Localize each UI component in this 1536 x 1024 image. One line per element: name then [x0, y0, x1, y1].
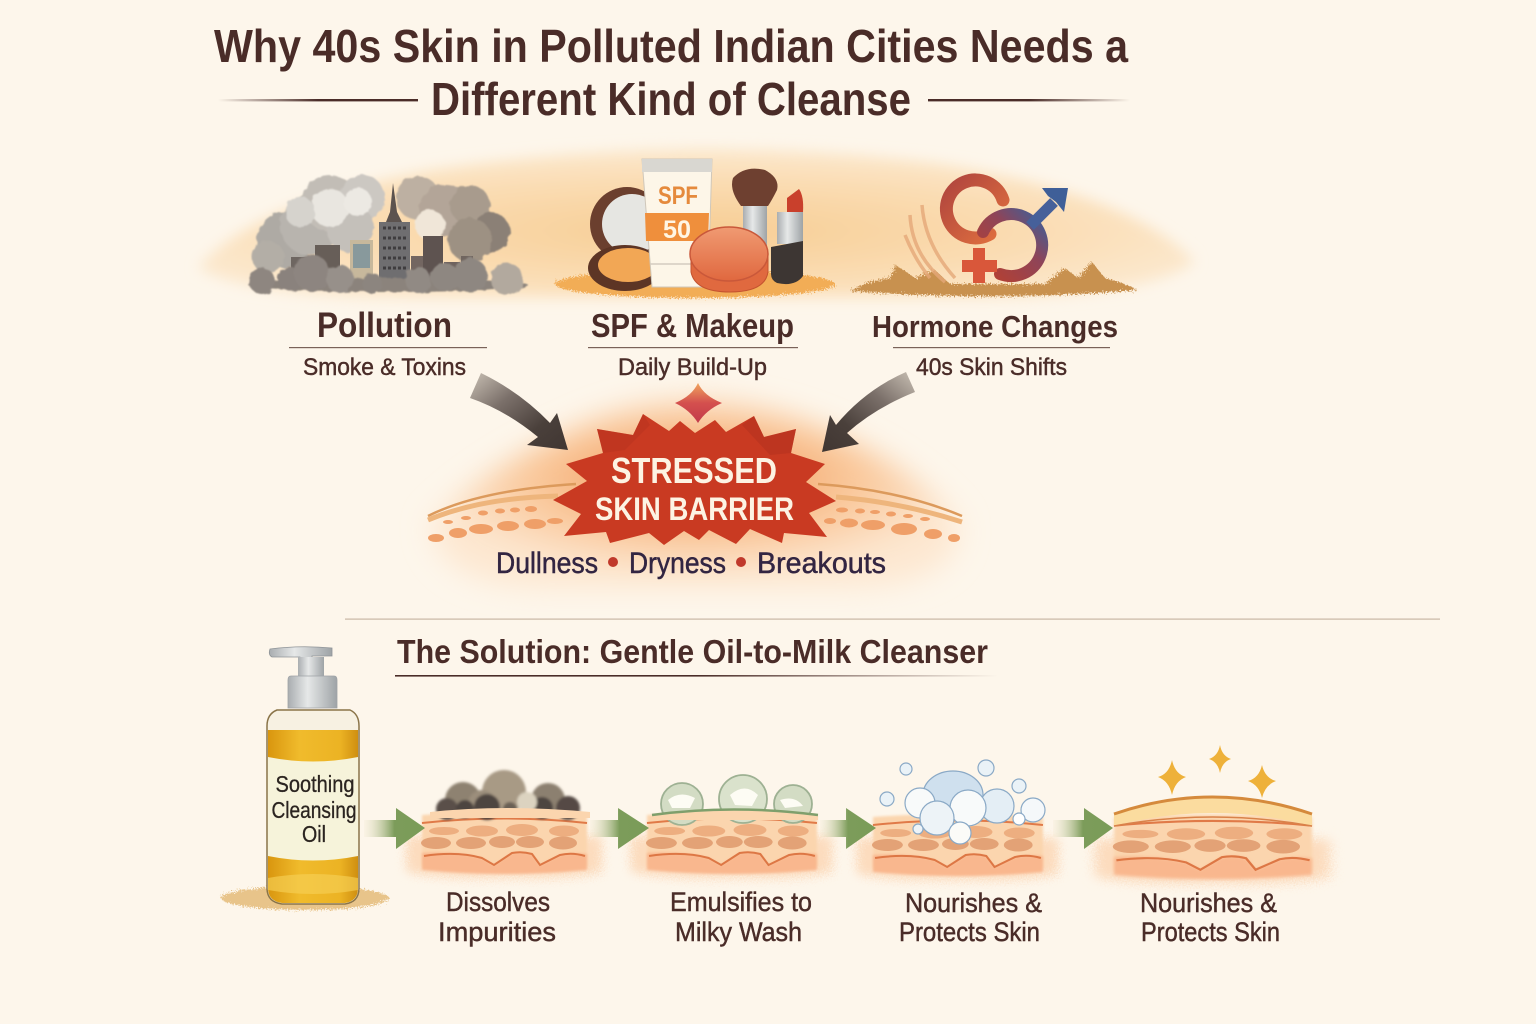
- icon: cleansing oil bottle: [221, 647, 389, 910]
- title: [214, 20, 1130, 125]
- skin layers right: [818, 484, 962, 542]
- heading: SPF and Makeup: [588, 307, 798, 381]
- heading: Pollution: Pollution: [317, 306, 452, 345]
- step 3: nourishes with foam: [857, 760, 1058, 947]
- icon: SPF tube and makeup: SPF: [658, 182, 698, 210]
- panel: causes backdrop haze: [198, 149, 1195, 298]
- brush: [743, 204, 767, 249]
- bottle label: Soothing: [276, 771, 354, 797]
- step 2: emulsifies: [631, 775, 832, 947]
- title: Why 40s Skin in Polluted Indian Cities Needs a: [214, 20, 1128, 72]
- label: Milky Wash: [675, 917, 802, 947]
- heading: Pollution: Smoke & Toxins: [303, 354, 466, 381]
- symptoms: Breakouts: [757, 547, 886, 580]
- label: [438, 887, 556, 947]
- icon: SPF tube and makeup: 50: [663, 216, 691, 244]
- heading: the solution: The Solution: Gentle Oil-to-Milk Cleanser: [397, 633, 988, 670]
- sparkles: [1158, 745, 1276, 798]
- icon: hormone symbols: [850, 180, 1138, 296]
- label: Emulsifies to: [670, 887, 812, 917]
- divider: [345, 618, 1440, 620]
- symptoms: Dullness: [496, 547, 598, 580]
- compact: [590, 187, 664, 261]
- burst label: SKIN BARRIER: [595, 491, 794, 527]
- symptoms: [496, 547, 886, 580]
- step 1: dissolves impurities: [406, 770, 602, 947]
- heading: Hormone Changes: Hormone Changes: [872, 309, 1118, 344]
- step 4: healthy skin: [1095, 745, 1330, 947]
- label: Nourishes &: [1140, 888, 1277, 918]
- label: [1140, 888, 1280, 947]
- label: Impurities: [438, 917, 556, 947]
- skin layers left: [428, 484, 576, 542]
- burst label: [595, 450, 794, 527]
- arrow: step 1: [364, 808, 425, 849]
- heading: Hormone Changes: 40s Skin Shifts: [916, 354, 1067, 381]
- heading: SPF and Makeup: Daily Build-Up: [618, 354, 767, 381]
- arrow: step 3: [820, 808, 876, 849]
- label: Protects Skin: [899, 917, 1040, 947]
- bottle label: [272, 771, 356, 847]
- title: Different Kind of Cleanse: [431, 73, 911, 125]
- label: [670, 887, 812, 947]
- arrow: step 4: [1053, 808, 1113, 849]
- label: [899, 888, 1042, 947]
- panel: stressed skin barrier: [428, 400, 962, 588]
- symptoms: Dryness: [629, 547, 726, 580]
- arrow: pollution to barrier: [470, 373, 568, 450]
- arrow: step 2: [590, 808, 649, 849]
- heading: SPF and Makeup: SPF & Makeup: [591, 307, 794, 344]
- arrow: hormones to barrier: [822, 372, 915, 452]
- burst: [553, 414, 836, 545]
- label: Dissolves: [446, 887, 550, 917]
- label: Protects Skin: [1141, 917, 1280, 947]
- heading: Hormone Changes: [872, 309, 1118, 381]
- jar: [691, 256, 768, 292]
- burst label: STRESSED: [611, 450, 777, 491]
- lipstick: [787, 189, 803, 212]
- bottle label: Cleansing: [272, 797, 356, 823]
- label: Nourishes &: [905, 888, 1042, 918]
- icon: polluted city: [248, 175, 528, 295]
- arrow: makeup to barrier: [675, 383, 722, 423]
- tube: [642, 159, 712, 287]
- icon: SPF tube and makeup: [555, 159, 835, 298]
- bottle label: Oil: [302, 821, 326, 847]
- heading: Pollution: [289, 306, 487, 381]
